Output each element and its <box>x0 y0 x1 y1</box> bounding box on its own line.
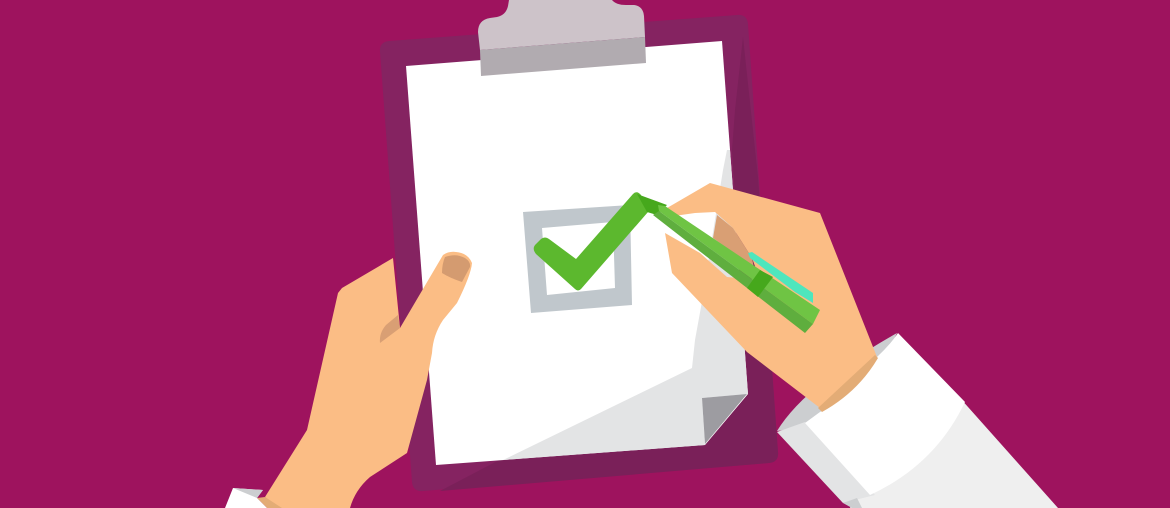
right wrist <box>818 355 878 412</box>
sleeve side shade <box>777 422 875 503</box>
palm shadow <box>380 315 400 343</box>
pen body <box>658 205 820 324</box>
clip <box>478 0 646 76</box>
pen band <box>747 270 773 297</box>
clipboard board <box>380 15 778 491</box>
left cuff <box>225 488 267 508</box>
checkbox <box>523 205 632 313</box>
sleeve opening <box>777 333 897 431</box>
left hand <box>225 252 472 508</box>
check mark <box>534 192 648 290</box>
right hand <box>665 183 878 412</box>
thumbnail <box>442 255 470 282</box>
finger shadow <box>713 215 754 268</box>
folded corner <box>702 394 747 444</box>
left wrist <box>257 497 282 508</box>
lower sleeve <box>850 398 1058 508</box>
pen clip <box>748 252 813 303</box>
pen tip <box>637 194 667 215</box>
white cuff <box>805 333 965 495</box>
right sleeve <box>777 333 1058 508</box>
paper shadow <box>503 150 748 460</box>
paper sheet <box>406 41 748 465</box>
pen <box>637 194 820 333</box>
